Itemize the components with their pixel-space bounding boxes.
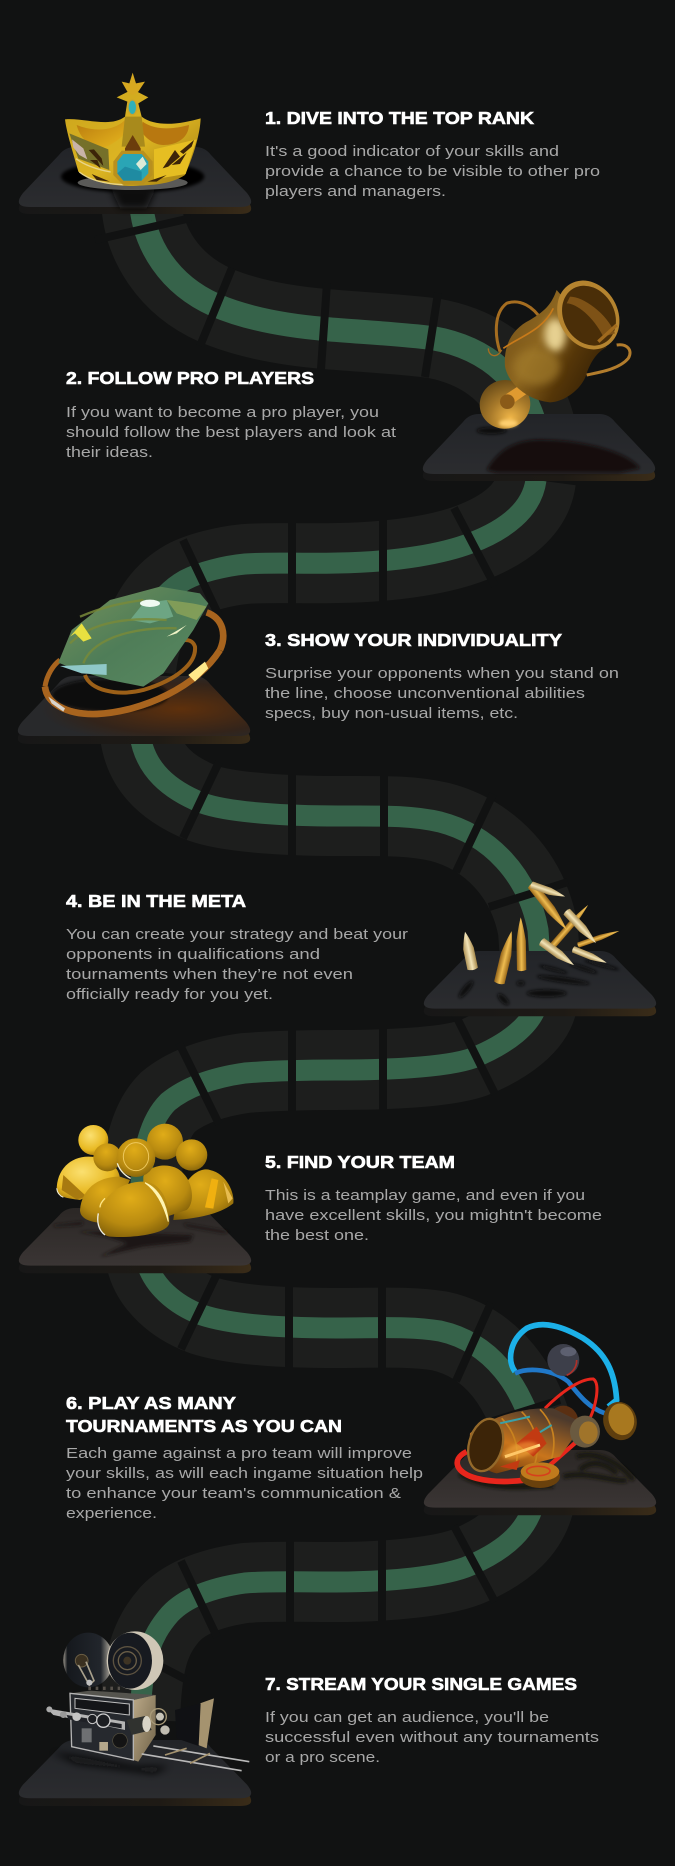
heading 6: TOURNAMENTS AS YOU CAN bbox=[66, 1416, 342, 1436]
heading 1: 1. DIVE INTO THE TOP RANK bbox=[265, 108, 534, 128]
heading 5: 5. FIND YOUR TEAM bbox=[265, 1152, 455, 1172]
step 1: dive into the top rank bbox=[19, 73, 600, 214]
description 3: Surprise your opponents when you stand on bbox=[265, 665, 619, 682]
heading 6: 6. PLAY AS MANY bbox=[66, 1393, 236, 1413]
description 4: officially ready for you yet. bbox=[66, 986, 273, 1003]
description 3 bbox=[265, 665, 619, 722]
description 5 bbox=[265, 1187, 602, 1244]
description 4 bbox=[66, 926, 408, 1003]
description 1 bbox=[265, 143, 600, 200]
heading 4: 4. BE IN THE META bbox=[66, 891, 246, 911]
icon: barrel with ribbons bbox=[457, 1325, 641, 1488]
platform 5 bbox=[19, 1208, 251, 1273]
description 5: have excellent skills, you mightn't become bbox=[265, 1207, 602, 1224]
platform 7 bbox=[19, 1740, 251, 1806]
icon: scattered bullets bbox=[457, 881, 620, 1007]
heading 2: 2. FOLLOW PRO PLAYERS bbox=[66, 368, 314, 388]
description 1: provide a chance to be visible to other pro bbox=[265, 163, 600, 180]
step 2: follow pro players bbox=[66, 269, 655, 481]
description 4: opponents in qualifications and bbox=[66, 946, 320, 963]
step 3: show your individuality bbox=[18, 587, 619, 744]
step 5: find your team bbox=[19, 1124, 602, 1273]
icon: green gem with rings bbox=[45, 587, 223, 714]
description 7: or a pro scene. bbox=[265, 1749, 380, 1766]
description 4: You can create your strategy and beat your bbox=[66, 926, 408, 943]
description 7: successful even without any tournaments bbox=[265, 1729, 599, 1746]
description 3: the line, choose unconventional abilities bbox=[265, 685, 585, 702]
description 1: players and managers. bbox=[265, 183, 446, 200]
description 2 bbox=[66, 404, 397, 461]
description 6: to enhance your team's communication & bbox=[66, 1485, 401, 1502]
description 1: It's a good indicator of your skills and bbox=[265, 143, 559, 160]
description 6: your skills, as will each ingame situation help bbox=[66, 1465, 423, 1482]
description 6: experience. bbox=[66, 1505, 157, 1522]
description 7 bbox=[265, 1709, 599, 1766]
step 6: play as many tournaments bbox=[66, 1325, 656, 1522]
step 7: stream your single games bbox=[19, 1631, 599, 1806]
description 4: tournaments when they’re not even bbox=[66, 966, 353, 983]
icon: golden team figures bbox=[53, 1124, 234, 1257]
platform 2 bbox=[423, 414, 655, 481]
platform 4 bbox=[424, 951, 656, 1016]
platform 6 bbox=[424, 1450, 656, 1515]
heading 6 bbox=[66, 1393, 342, 1436]
icon: film camera bbox=[46, 1631, 249, 1773]
description 7: If you can get an audience, you'll be bbox=[265, 1709, 549, 1726]
description 5: This is a teamplay game, and even if you bbox=[265, 1187, 585, 1204]
platform 1 bbox=[19, 147, 251, 214]
description 5: the best one. bbox=[265, 1227, 369, 1244]
platform 3 bbox=[18, 676, 250, 744]
description 2: should follow the best players and look at bbox=[66, 424, 397, 441]
description 2: If you want to become a pro player, you bbox=[66, 404, 379, 421]
description 6 bbox=[66, 1445, 423, 1522]
description 3: specs, buy non-usual items, etc. bbox=[265, 705, 518, 722]
icon: bronze trophy bbox=[475, 269, 640, 473]
description 2: their ideas. bbox=[66, 444, 153, 461]
icon: golden crown bbox=[61, 73, 204, 208]
description 6: Each game against a pro team will improve bbox=[66, 1445, 412, 1462]
heading 3: 3. SHOW YOUR INDIVIDUALITY bbox=[265, 630, 562, 650]
heading 7: 7. STREAM YOUR SINGLE GAMES bbox=[265, 1674, 577, 1694]
winding road bbox=[95, 200, 568, 1720]
step 4: be in the meta bbox=[66, 881, 656, 1016]
